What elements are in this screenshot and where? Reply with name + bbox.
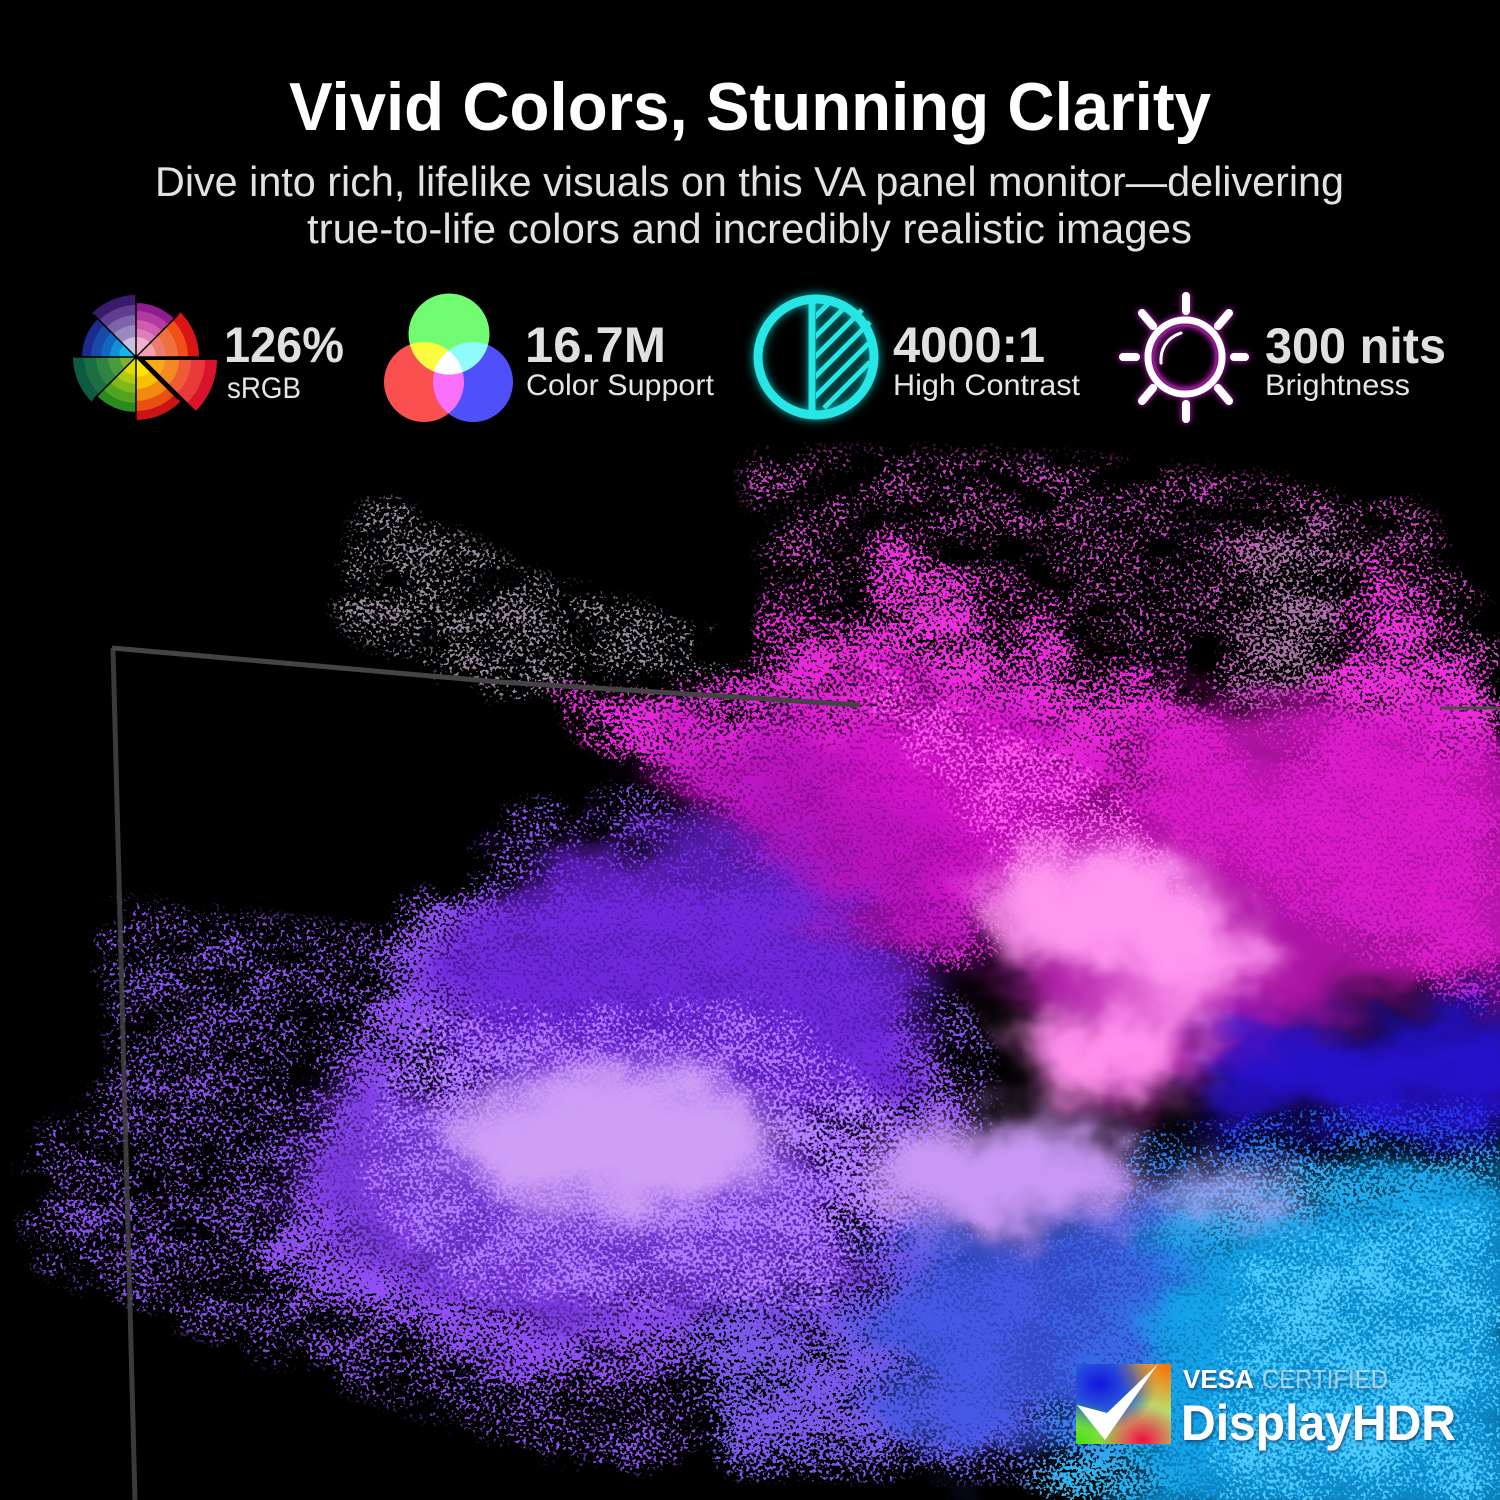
icon: contrast circle (758, 298, 874, 416)
monitor frame (112, 648, 1500, 1500)
stat: 300 nits: 300 nits (1265, 318, 1446, 374)
badge text: CERTIFIED (1262, 1364, 1388, 1394)
powder dense speckle (240, 500, 1500, 1500)
subtitle: true-to-life colors and incredibly realistic images (307, 205, 1192, 252)
feature: 16.7M colour support (384, 294, 715, 422)
badge text: VESA (1183, 1364, 1254, 1394)
icon: sun (1123, 296, 1245, 419)
DisplayHDR badge (1076, 1364, 1456, 1451)
subtitle: Dive into rich, lifelike visuals on this VA panel monitor—delivering (155, 158, 1344, 205)
icon: gradient check mark (1076, 1364, 1171, 1444)
label: Brightness: Brightness (1265, 369, 1410, 402)
feature: 126% sRGB (73, 295, 343, 420)
stat: 4000:1: 4000:1 (893, 317, 1045, 373)
feature: 300 nits brightness (1123, 296, 1446, 419)
badge text: DisplayHDR (1181, 1395, 1456, 1451)
badge text (1181, 1364, 1456, 1451)
icon: RGB venn (384, 294, 513, 422)
label: sRGB: sRGB (227, 372, 301, 405)
powder smooth colour body (300, 680, 1500, 1500)
label: High Contrast: High Contrast (893, 369, 1081, 402)
feature: 4000:1 contrast (758, 298, 1081, 416)
stat: 126%: 126% (224, 317, 344, 373)
powder sparse speckle (10, 440, 1500, 1500)
powder explosion (10, 440, 1500, 1500)
label: Color Support: Color Support (526, 369, 715, 402)
powder bright clouds (450, 840, 1310, 1233)
subtitle (155, 158, 1344, 252)
icon: colour wheel (73, 295, 217, 420)
title: Vivid Colors, Stunning Clarity (289, 69, 1211, 145)
stat: 16.7M: 16.7M (525, 317, 666, 373)
powder bright speckle (350, 640, 1500, 1500)
